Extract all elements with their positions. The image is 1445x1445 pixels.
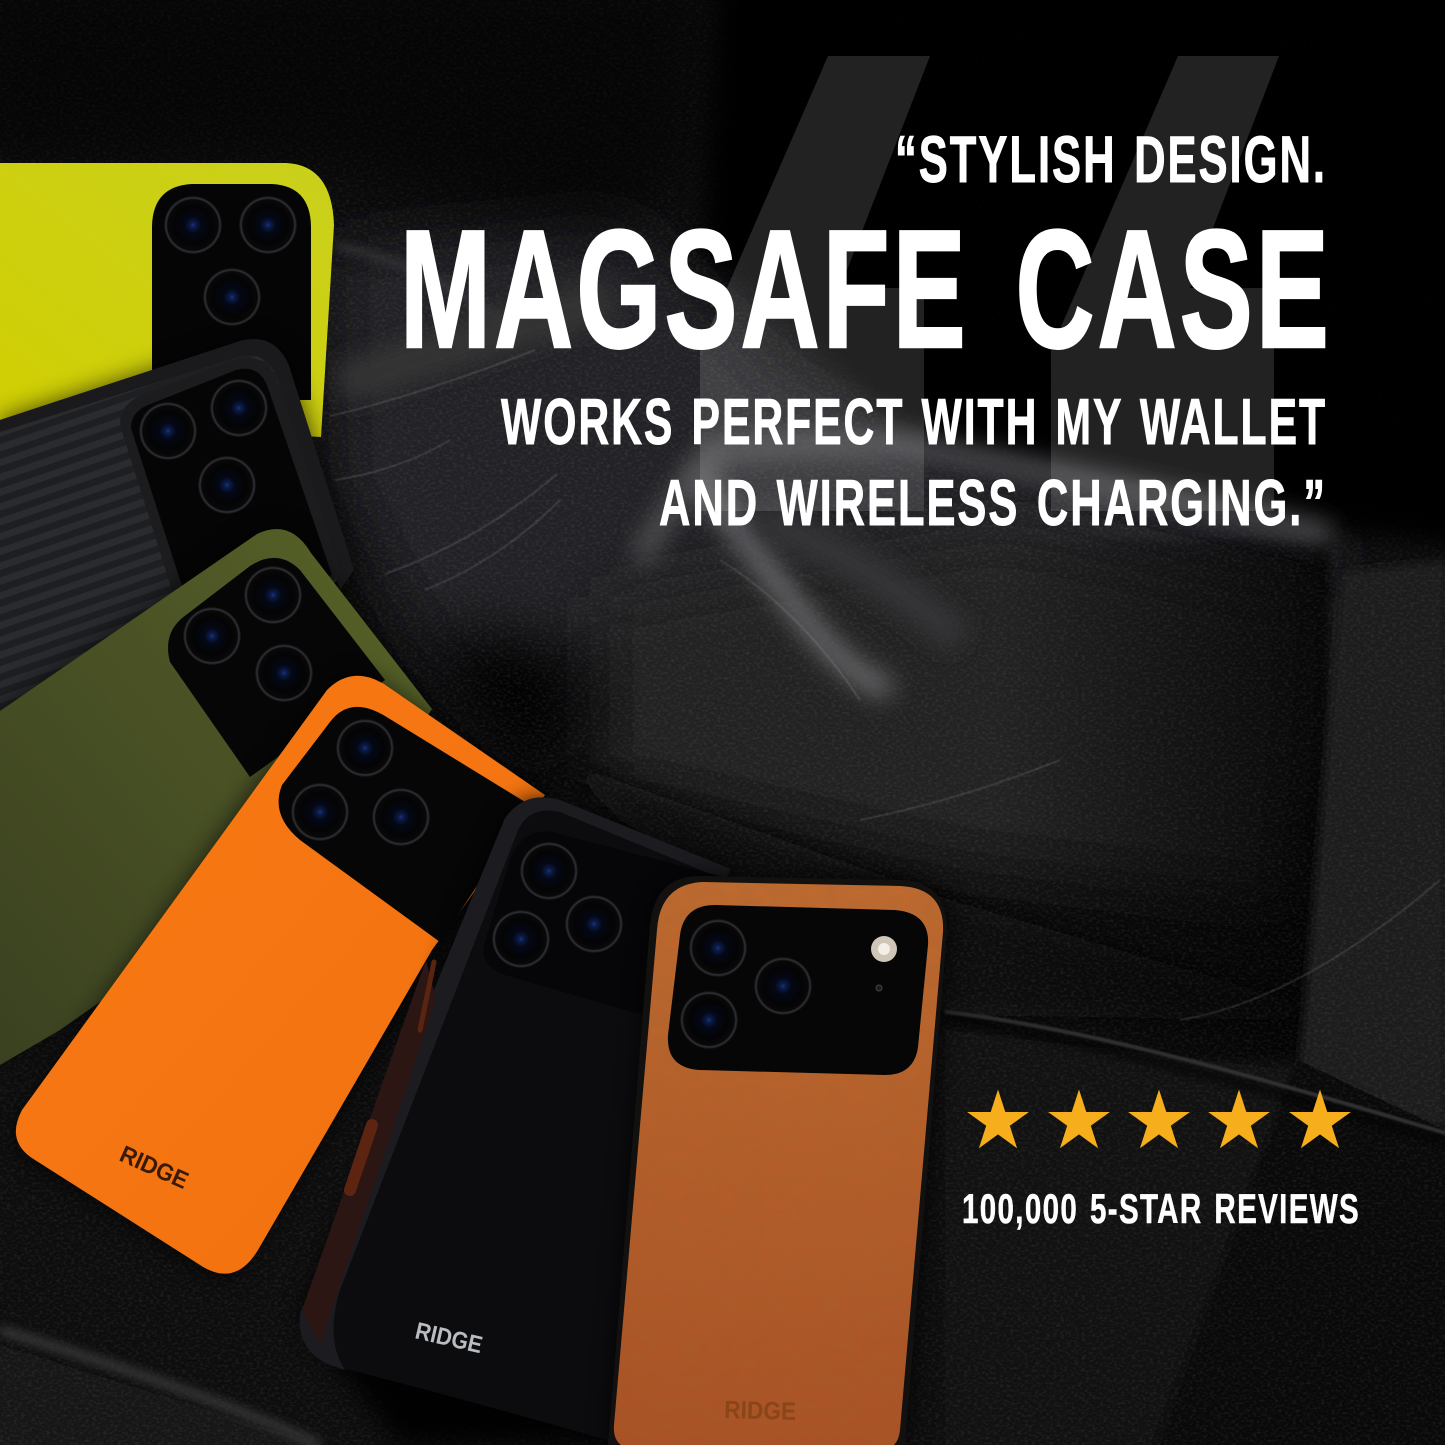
camera island xyxy=(168,558,385,777)
phone: orange case xyxy=(16,676,545,1277)
logo: RIDGE: RIDGE xyxy=(413,1318,485,1359)
logo: RIDGE: RIDGE xyxy=(724,1396,797,1426)
logo: RIDGE: RIDGE xyxy=(116,1141,192,1195)
camera island xyxy=(279,707,530,942)
five-star rating xyxy=(967,1090,1351,1148)
phone: olive case xyxy=(0,529,432,1065)
flash xyxy=(871,936,897,962)
reflected orange side rim and buttons xyxy=(302,960,436,1345)
camera island xyxy=(152,184,311,400)
phone: carbon fibre case xyxy=(0,339,354,730)
camera island xyxy=(668,905,928,1075)
phone: tan leather case xyxy=(600,870,960,1445)
phone: black case xyxy=(300,797,735,1445)
decorative large quotation mark xyxy=(700,56,1279,511)
phone: yellow case xyxy=(0,163,334,437)
camera island xyxy=(483,832,735,1017)
camera island xyxy=(120,358,342,640)
headline quote xyxy=(400,122,1332,539)
